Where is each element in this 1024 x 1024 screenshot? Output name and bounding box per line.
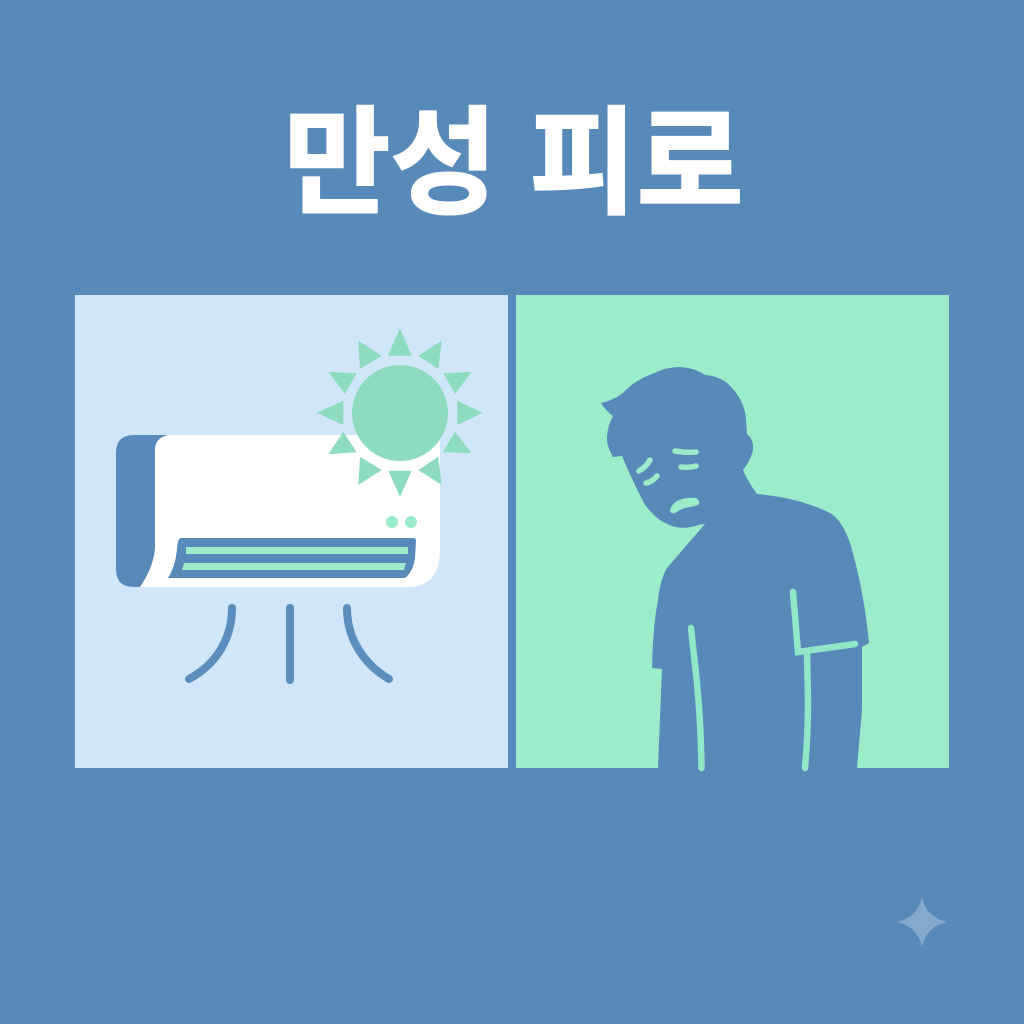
mouth	[670, 498, 699, 513]
panel: tired person	[516, 295, 949, 768]
body and sleeve lines	[691, 592, 855, 768]
panel: air conditioner and sun	[75, 295, 508, 768]
icon: slumped person silhouette	[601, 367, 869, 768]
eye lines	[639, 451, 696, 483]
icon: air conditioner	[116, 435, 440, 587]
icon: sparkle	[897, 897, 947, 947]
title: 만성 피로	[284, 98, 744, 229]
icon: air flow lines	[189, 608, 389, 680]
icon: sun	[317, 328, 483, 497]
